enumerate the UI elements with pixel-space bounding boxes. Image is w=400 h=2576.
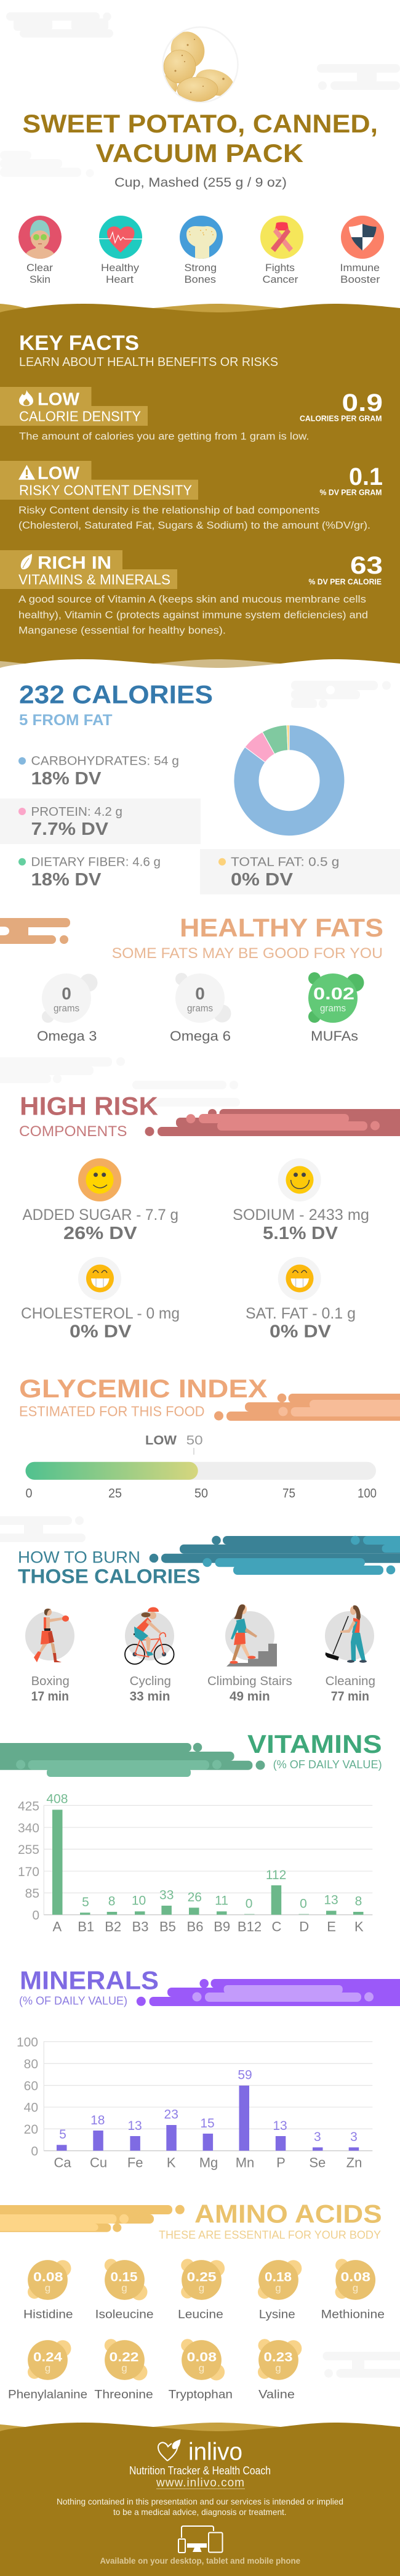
bar chart: vitamins: K bbox=[354, 1919, 364, 1934]
title: SWEET POTATO, CANNED, bbox=[22, 109, 378, 138]
bar chart: minerals: 3 bbox=[314, 2130, 321, 2144]
amino: methionine: Methionine bbox=[321, 2308, 385, 2322]
footer bbox=[0, 2423, 400, 2576]
amino: methionine bbox=[321, 2259, 385, 2322]
heading: VITAMINS bbox=[247, 1729, 382, 1758]
stat: cholesterol: 0% DV bbox=[70, 1322, 132, 1342]
subheading: THESE ARE ESSENTIAL FOR YOUR BODY bbox=[159, 2228, 381, 2241]
icon: grinning face bbox=[278, 1257, 321, 1300]
panel: calories bbox=[0, 680, 400, 895]
bar chart: vitamins: 8 bbox=[108, 1895, 115, 1909]
label bbox=[26, 262, 53, 285]
stat: carbohydrates: CARBOHYDRATES: 54 g bbox=[31, 755, 179, 768]
title: VACUUM PACK bbox=[96, 139, 303, 168]
panel: vitamins bbox=[0, 1729, 382, 1934]
benefit: strong bones bbox=[180, 216, 223, 285]
bar chart: minerals: 5 bbox=[59, 2127, 66, 2142]
fact: low risky content density: % DV PER GRAM bbox=[320, 488, 382, 497]
bar chart: vitamins: 26 bbox=[188, 1890, 202, 1904]
amino: tryptophan: Tryptophan bbox=[169, 2388, 233, 2402]
activity: boxing bbox=[25, 1608, 74, 1704]
stat: sodium: SODIUM - 2433 mg bbox=[233, 1206, 369, 1224]
heading: KEY FACTS bbox=[19, 331, 139, 355]
stat: dietary fiber: DIETARY FIBER: 4.6 g bbox=[31, 856, 161, 869]
stat: omega 6: Omega 6 bbox=[170, 1028, 231, 1044]
label bbox=[101, 262, 140, 285]
amino: leucine: Leucine bbox=[178, 2308, 223, 2322]
amino: phenylalanine: g bbox=[45, 2362, 50, 2374]
label: Bones bbox=[185, 274, 216, 285]
heading: HEALTHY FATS bbox=[180, 913, 383, 942]
amino: valine: 0.23 bbox=[263, 2350, 293, 2365]
bar chart: vitamins: 112 bbox=[266, 1868, 286, 1882]
benefit: healthy heart bbox=[99, 216, 142, 285]
disclaimer: to be a medical advice, diagnosis or treatment. bbox=[113, 2507, 287, 2517]
gauge: glycemic value bbox=[26, 1433, 377, 1501]
label: Healthy bbox=[101, 262, 140, 274]
stat: MUFAs: 0.02 bbox=[313, 984, 354, 1003]
panel: healthy fats bbox=[0, 913, 383, 1044]
amino: isoleucine bbox=[95, 2259, 154, 2322]
stat: sodium: 5.1% DV bbox=[263, 1224, 338, 1243]
amino: phenylalanine: Phenylalanine bbox=[8, 2388, 87, 2402]
activity: boxing: Boxing bbox=[31, 1674, 70, 1688]
bar chart: vitamins: 33 bbox=[159, 1888, 174, 1903]
stat: omega 3: Omega 3 bbox=[37, 1028, 97, 1044]
icon: devices bbox=[178, 2526, 223, 2553]
bar chart: minerals: 13 bbox=[273, 2119, 287, 2133]
bar chart: minerals: 40 bbox=[24, 2101, 38, 2115]
amino: histidine: g bbox=[45, 2282, 50, 2294]
amino: threonine: Threonine bbox=[94, 2388, 153, 2402]
gauge: glycemic value: 50 bbox=[186, 1433, 203, 1447]
gauge: glycemic value: 25 bbox=[108, 1487, 122, 1501]
fact: rich in vitamins and minerals: A good source of Vitamin A (keeps skin and mucous membrane cells bbox=[18, 594, 366, 605]
bar chart: vitamins: B5 bbox=[159, 1919, 176, 1934]
bar chart: vitamins: A bbox=[53, 1919, 62, 1934]
stat: saturated fat: SAT. FAT - 0.1 g bbox=[246, 1305, 356, 1322]
subheading: LEARN ABOUT HEALTH BENEFITS OR RISKS bbox=[19, 355, 278, 369]
stat: total fat bbox=[200, 849, 400, 895]
bar chart: minerals: 3 bbox=[350, 2130, 358, 2144]
icon: leaf bbox=[21, 554, 32, 569]
stat: cholesterol: CHOLESTEROL - 0 mg bbox=[21, 1305, 180, 1322]
amino: lysine bbox=[258, 2260, 302, 2322]
bar chart: vitamins: B2 bbox=[105, 1919, 121, 1934]
icon: woman with face mask bbox=[18, 216, 62, 259]
amino: isoleucine: Isoleucine bbox=[95, 2308, 154, 2322]
subheading: (% OF DAILY VALUE) bbox=[19, 1994, 127, 2007]
amino: threonine: 0.22 bbox=[110, 2350, 139, 2365]
gauge: glycemic value: 100 bbox=[358, 1487, 377, 1501]
amino: threonine bbox=[94, 2339, 153, 2402]
fact: low risky content density: (Cholesterol, Saturated Fat, Sugars & Sodium) to the amount (%DV/gr). bbox=[18, 520, 370, 531]
icon: grinning face bbox=[78, 1257, 121, 1300]
bar chart: vitamins: 425 bbox=[18, 1799, 39, 1813]
bar chart: minerals: K bbox=[167, 2155, 176, 2170]
stat: MUFAs bbox=[308, 972, 364, 1044]
icon: smiley on orange bbox=[78, 1158, 121, 1201]
label: Cancer bbox=[262, 274, 298, 285]
amino: valine: g bbox=[275, 2362, 281, 2374]
panel: high risk components bbox=[19, 1091, 400, 1342]
heading: GLYCEMIC INDEX bbox=[19, 1374, 267, 1403]
gauge: glycemic value: 50 bbox=[194, 1487, 208, 1501]
bar chart: vitamins: 170 bbox=[18, 1865, 39, 1879]
title bbox=[22, 109, 378, 168]
stat: omega 6 bbox=[170, 973, 231, 1044]
fact: rich in vitamins and minerals: RICH IN bbox=[38, 553, 111, 573]
fact: low calorie density bbox=[0, 387, 383, 442]
icon: heart with pulse bbox=[99, 216, 142, 259]
panel: how to burn those calories bbox=[18, 1536, 400, 1704]
label: Booster bbox=[340, 274, 380, 285]
icon: bone bbox=[180, 216, 223, 262]
stat: added sugar: 26% DV bbox=[63, 1224, 137, 1243]
logo: inlivo: inlivo bbox=[188, 2439, 242, 2466]
icon: woman sweeping bbox=[325, 1606, 374, 1663]
disclaimer: Nothing contained in this presentation and our services is intended or implied bbox=[57, 2497, 343, 2506]
bar chart: vitamins: B3 bbox=[132, 1919, 148, 1934]
bar chart: vitamins bbox=[18, 1792, 372, 1934]
label bbox=[185, 262, 217, 285]
subheading: (% OF DAILY VALUE) bbox=[273, 1758, 382, 1771]
amino: lysine: g bbox=[275, 2282, 281, 2294]
disclaimer bbox=[57, 2497, 343, 2517]
label: Heart bbox=[106, 274, 134, 285]
bar chart: vitamins: 5 bbox=[82, 1895, 89, 1909]
bar chart: vitamins: B9 bbox=[214, 1919, 230, 1934]
bar chart: minerals: 18 bbox=[90, 2113, 105, 2127]
stat: carbohydrates: 18% DV bbox=[31, 769, 102, 789]
tagline: Nutrition Tracker & Health Coach bbox=[129, 2464, 271, 2477]
amino: leucine: 0.25 bbox=[187, 2270, 217, 2285]
fact: low risky content density: 0.1 bbox=[349, 463, 383, 490]
bar chart: vitamins: 0 bbox=[300, 1897, 307, 1911]
activity: cleaning: Cleaning bbox=[326, 1674, 375, 1688]
amino: valine: Valine bbox=[258, 2388, 295, 2402]
amino: phenylalanine bbox=[8, 2340, 87, 2402]
icon: warning triangle bbox=[18, 465, 35, 480]
fact: low calorie density: CALORIES PER GRAM bbox=[300, 414, 382, 423]
benefit: clear skin bbox=[18, 216, 62, 285]
availability note: Available on your desktop, tablet and mobile phone bbox=[100, 2556, 300, 2566]
amino: methionine: 0.08 bbox=[341, 2270, 370, 2285]
activity: cleaning: 77 min bbox=[331, 1689, 369, 1704]
fact: low calorie density: LOW bbox=[38, 389, 80, 409]
bar chart: vitamins: 408 bbox=[46, 1792, 68, 1806]
stat: protein bbox=[0, 798, 201, 844]
fact: rich in vitamins and minerals: healthy), Vitamin C (protects against immune system deficiencies) and bbox=[18, 610, 368, 621]
bar chart: minerals: Mg bbox=[199, 2155, 218, 2170]
bar chart: minerals: 13 bbox=[127, 2119, 142, 2133]
amino: methionine: g bbox=[353, 2282, 358, 2294]
icon: cyclist bbox=[125, 1607, 174, 1664]
activity: cleaning bbox=[325, 1606, 375, 1704]
bar chart: minerals: Cu bbox=[90, 2155, 107, 2170]
fact: rich in vitamins and minerals: 63 bbox=[350, 552, 383, 579]
fact: low calorie density: The amount of calories you are getting from 1 gram is low. bbox=[19, 431, 309, 442]
bar chart: vitamins: 8 bbox=[355, 1895, 362, 1909]
fact: rich in vitamins and minerals: Manganese (essential for healthy bones). bbox=[18, 625, 226, 636]
stat: total fat: TOTAL FAT: 0.5 g bbox=[231, 856, 339, 869]
bar chart: vitamins: 85 bbox=[25, 1887, 39, 1901]
amino: histidine: Histidine bbox=[23, 2308, 73, 2322]
fact: rich in vitamins and minerals bbox=[0, 550, 383, 636]
stat: added sugar: ADDED SUGAR - 7.7 g bbox=[22, 1206, 178, 1224]
benefit: immune booster bbox=[340, 216, 384, 285]
bar chart: vitamins: 0 bbox=[32, 1909, 39, 1923]
label: Fights bbox=[265, 262, 295, 274]
bar chart: vitamins: D bbox=[299, 1919, 309, 1934]
panel: amino acids bbox=[0, 2200, 385, 2402]
heading: HIGH RISK bbox=[20, 1091, 158, 1120]
bar chart: minerals: 0 bbox=[31, 2144, 38, 2158]
heading: MINERALS bbox=[20, 1965, 159, 1994]
amino: isoleucine: g bbox=[121, 2282, 127, 2294]
activity: climbing stairs bbox=[207, 1604, 292, 1704]
subheading: COMPONENTS bbox=[19, 1123, 127, 1140]
stat: MUFAs: grams bbox=[320, 1004, 346, 1014]
stat: omega 6: grams bbox=[187, 1004, 213, 1014]
label: Strong bbox=[185, 262, 217, 274]
bar chart: minerals: P bbox=[276, 2155, 286, 2170]
amino: tryptophan bbox=[169, 2339, 233, 2402]
stat: protein: PROTEIN: 4.2 g bbox=[31, 805, 122, 819]
fact: low calorie density: CALORIE DENSITY bbox=[19, 408, 141, 425]
fact: rich in vitamins and minerals: % DV PER CALORIE bbox=[309, 577, 382, 587]
stat: omega 3: grams bbox=[54, 1004, 79, 1014]
food photo: potatoes bbox=[158, 27, 238, 102]
panel: glycemic index bbox=[19, 1374, 400, 1501]
bar chart: minerals bbox=[17, 2036, 372, 2170]
icon: flame bbox=[19, 390, 33, 406]
amino: leucine bbox=[178, 2259, 225, 2322]
panel: key facts bbox=[0, 304, 400, 675]
bar chart: minerals: 23 bbox=[164, 2108, 178, 2122]
bar chart: minerals: Zn bbox=[346, 2155, 362, 2170]
amino: valine bbox=[258, 2339, 302, 2402]
stat: omega 3 bbox=[37, 973, 97, 1044]
activity: climbing stairs: Climbing Stairs bbox=[207, 1674, 292, 1688]
fact: low risky content density: LOW bbox=[38, 463, 80, 483]
bar chart: minerals: 60 bbox=[24, 2079, 38, 2093]
amino: lysine: 0.18 bbox=[265, 2270, 292, 2285]
label: Clear bbox=[26, 262, 53, 274]
fact: low risky content density bbox=[0, 461, 383, 531]
label bbox=[340, 262, 380, 285]
panel: minerals bbox=[17, 1965, 400, 2170]
fact: low calorie density: 0.9 bbox=[342, 389, 383, 416]
gauge: glycemic value: 0 bbox=[26, 1487, 32, 1501]
stat: omega 6: 0 bbox=[195, 984, 205, 1003]
subheading: ESTIMATED FOR THIS FOOD bbox=[19, 1404, 204, 1420]
icon: awareness ribbon bbox=[260, 216, 303, 259]
activity: cycling: Cycling bbox=[130, 1674, 171, 1688]
amino: isoleucine: 0.15 bbox=[111, 2270, 138, 2285]
bar chart: minerals: 59 bbox=[238, 2068, 252, 2082]
amino: threonine: g bbox=[121, 2362, 127, 2374]
panel: how to burn those calories: THOSE CALORIES bbox=[18, 1565, 201, 1587]
amino: tryptophan: 0.08 bbox=[187, 2350, 217, 2365]
gauge: glycemic value: 75 bbox=[282, 1487, 295, 1501]
label: Immune bbox=[340, 262, 380, 274]
subheading: 5 FROM FAT bbox=[19, 712, 112, 729]
stat: added sugar bbox=[22, 1158, 178, 1243]
stat: total fat: 0% DV bbox=[231, 870, 294, 890]
bar chart: vitamins: 10 bbox=[132, 1894, 146, 1908]
stat: dietary fiber bbox=[18, 856, 161, 890]
gauge: glycemic value: LOW bbox=[145, 1433, 177, 1447]
fact: rich in vitamins and minerals: VITAMINS & MINERALS bbox=[18, 572, 170, 588]
icon: woman on stairs bbox=[225, 1604, 277, 1667]
label bbox=[262, 262, 298, 285]
bar chart: minerals: Mn bbox=[236, 2155, 254, 2170]
activity: climbing stairs: 49 min bbox=[230, 1689, 270, 1704]
bar chart: vitamins: B1 bbox=[78, 1919, 94, 1934]
fact: low risky content density: Risky Content density is the relationship of bad components bbox=[18, 505, 320, 516]
bar chart: minerals: Fe bbox=[127, 2155, 143, 2170]
stat: cholesterol bbox=[21, 1257, 180, 1342]
bar chart: minerals: 15 bbox=[200, 2116, 215, 2131]
amino: leucine: g bbox=[199, 2282, 204, 2294]
icon: shield bbox=[341, 216, 384, 259]
bar chart: minerals: 100 bbox=[17, 2036, 38, 2050]
stat: dietary fiber: 18% DV bbox=[31, 870, 102, 890]
icon: smiley bbox=[278, 1158, 321, 1201]
amino: phenylalanine: 0.24 bbox=[33, 2350, 62, 2365]
stat: omega 3: 0 bbox=[62, 984, 71, 1003]
amino: histidine: 0.08 bbox=[33, 2270, 63, 2285]
label: Skin bbox=[30, 274, 50, 285]
bar chart: vitamins: B6 bbox=[187, 1919, 203, 1934]
stat: saturated fat bbox=[246, 1257, 356, 1342]
bar chart: vitamins: 340 bbox=[18, 1821, 39, 1835]
activity: boxing: 17 min bbox=[31, 1689, 69, 1704]
website link: www.inlivo.com bbox=[156, 2477, 244, 2490]
stat: saturated fat: 0% DV bbox=[270, 1322, 332, 1342]
bar chart: vitamins: 0 bbox=[246, 1897, 252, 1911]
icon: boxer bbox=[25, 1608, 74, 1662]
activity: cycling bbox=[125, 1607, 174, 1704]
heading: 232 CALORIES bbox=[19, 680, 213, 709]
amino: tryptophan: g bbox=[199, 2362, 204, 2374]
serving size subtitle: Cup, Mashed (255 g / 9 oz) bbox=[114, 176, 287, 190]
subheading: SOME FATS MAY BE GOOD FOR YOU bbox=[112, 945, 383, 962]
bar chart: minerals: 20 bbox=[24, 2123, 38, 2137]
bar chart: vitamins: 11 bbox=[215, 1894, 228, 1908]
bar chart: vitamins: B12 bbox=[238, 1919, 262, 1934]
activity: cycling: 33 min bbox=[130, 1689, 170, 1704]
bar chart: vitamins: 13 bbox=[324, 1893, 338, 1908]
bar chart: minerals: Se bbox=[309, 2155, 326, 2170]
stat: sodium bbox=[233, 1158, 369, 1243]
bar chart: minerals: Ca bbox=[54, 2155, 71, 2170]
bar chart: vitamins: C bbox=[271, 1919, 281, 1934]
donut chart: macronutrients bbox=[234, 725, 345, 836]
logo: inlivo bbox=[158, 2439, 242, 2466]
heading: HOW TO BURN bbox=[18, 1548, 140, 1567]
amino: histidine bbox=[23, 2260, 73, 2322]
amino: lysine: Lysine bbox=[259, 2308, 295, 2322]
stat: carbohydrates bbox=[18, 755, 179, 789]
fact: low risky content density: RISKY CONTENT DENSITY bbox=[19, 482, 192, 498]
benefit: fights cancer bbox=[260, 216, 303, 285]
heading: AMINO ACIDS bbox=[194, 2200, 382, 2229]
stat: protein: 7.7% DV bbox=[31, 819, 109, 839]
bar chart: minerals: 80 bbox=[24, 2057, 38, 2071]
bar chart: vitamins: E bbox=[327, 1919, 336, 1934]
bar chart: vitamins: 255 bbox=[18, 1843, 39, 1857]
stat: MUFAs: MUFAs bbox=[311, 1028, 358, 1044]
